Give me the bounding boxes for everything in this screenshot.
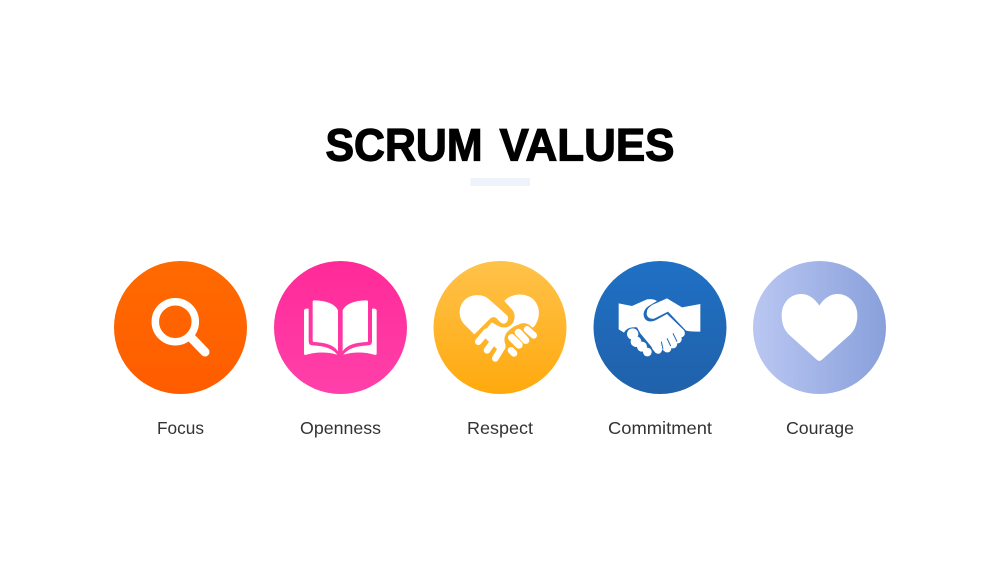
openness label: Openness: [300, 418, 381, 438]
courage label: Courage: [786, 418, 854, 438]
title: VALUES: [500, 119, 674, 170]
courage circle: [753, 261, 886, 394]
openness circle: [274, 261, 407, 394]
commitment label: Commitment: [608, 418, 712, 438]
title underline accent: [470, 178, 530, 186]
respect label: Respect: [467, 418, 533, 438]
panel: focus: [114, 261, 247, 438]
respect circle: [434, 261, 566, 394]
icon: heart: [782, 294, 857, 361]
commitment circle: [594, 261, 726, 394]
focus label: Focus: [157, 418, 204, 438]
panel: commitment: [594, 261, 726, 438]
icon: hands forming a heart: [460, 294, 539, 358]
title: [326, 119, 674, 170]
icon: handshake: [619, 298, 700, 356]
icon: magnifying glass: [155, 302, 205, 352]
panel: respect: [434, 261, 566, 438]
icon: open book: [304, 300, 377, 355]
focus circle: [114, 261, 247, 394]
panel: openness: [274, 261, 407, 438]
title: SCRUM: [326, 119, 482, 170]
panel: courage: [753, 261, 886, 438]
